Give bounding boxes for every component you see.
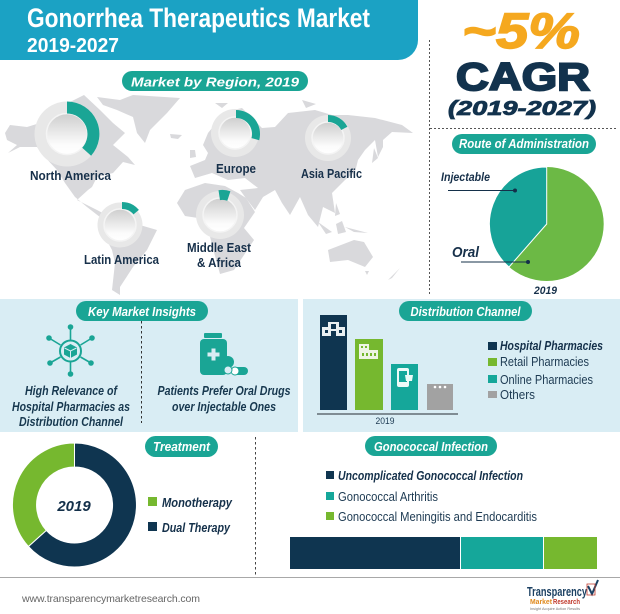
heading: key market insights: Key Market Insights	[88, 304, 196, 319]
header banner: Gonorrhea Therapeutics Market	[27, 3, 370, 33]
legend: distribution channel	[488, 338, 603, 402]
donut chart: treatment: 2019	[56, 498, 91, 515]
legend: gonococcal infection: Gonococcal Meningitis and Endocarditis	[338, 509, 537, 524]
bar chart: distribution channel: 2019	[376, 416, 394, 427]
logo: transparency market research: Market	[530, 597, 552, 606]
donut: north america: North America	[30, 169, 112, 183]
text: hospital pharmacies insight	[12, 383, 130, 429]
bar chart: distribution channel	[317, 315, 458, 427]
panel: distribution channel	[303, 299, 620, 432]
legend: gonococcal infection: Gonococcal Arthritis	[338, 489, 438, 504]
donut: asia pacific: Asia Pacific	[301, 167, 362, 181]
donut: europe: Europe	[216, 162, 256, 176]
logo: transparency market research: Insight Acquire Action Results	[530, 606, 580, 611]
heading: route of administration	[452, 134, 596, 154]
panel: key market insights	[0, 299, 298, 432]
text: hospital pharmacies insight: Distribution Channel	[19, 414, 123, 429]
legend: gonococcal infection	[326, 468, 537, 524]
text: oral drugs insight: Patients Prefer Oral Drugs	[158, 383, 290, 398]
donut: asia pacific	[301, 115, 362, 181]
logo: transparency market research: Research	[553, 597, 580, 606]
stacked bar: gonococcal infection	[290, 537, 597, 569]
header banner	[0, 0, 418, 60]
pie chart: route of administration: Injectable	[441, 170, 490, 184]
donut: middle east and africa: & Africa	[197, 256, 242, 270]
legend: treatment: Dual Therapy	[162, 520, 231, 535]
text: hospital pharmacies insight: Hospital Pharmacies as	[12, 399, 130, 414]
footer url: www.transparencymarketresearch.com	[21, 593, 200, 605]
heading: treatment	[145, 436, 218, 457]
legend: gonococcal infection: Uncomplicated Gonococcal Infection	[338, 468, 523, 483]
legend: distribution channel: Retail Pharmacies	[500, 354, 589, 369]
donut: north america	[30, 102, 112, 183]
donut: latin america	[84, 202, 160, 267]
logo: transparency market research: Transparency	[527, 584, 588, 599]
legend: distribution channel: Online Pharmacies	[500, 372, 593, 387]
heading: key market insights	[76, 301, 208, 321]
heading: distribution channel	[399, 301, 532, 321]
pie chart: route of administration: Oral	[452, 244, 480, 261]
cagr callout: (2019-2027)	[448, 98, 596, 120]
pie chart: route of administration: 2019	[533, 285, 558, 297]
legend: treatment: Monotherapy	[162, 495, 233, 510]
heading: market by region	[122, 71, 308, 91]
heading: gonococcal infection: Gonococcal Infection	[374, 439, 488, 454]
donut: latin america: Latin America	[84, 253, 160, 267]
donut: middle east and africa: Middle East	[187, 241, 252, 255]
header banner: 2019-2027	[27, 35, 119, 57]
donut: middle east and africa	[187, 190, 252, 270]
cagr callout: CAGR	[456, 56, 590, 99]
text: oral drugs insight	[158, 383, 290, 414]
cagr callout	[448, 3, 596, 120]
text: hospital pharmacies insight: High Relevance of	[25, 383, 118, 398]
logo: transparency market research	[527, 580, 598, 611]
world map	[5, 95, 413, 295]
donut: europe	[211, 109, 260, 176]
text: oral drugs insight: over Injectable Ones	[172, 399, 276, 414]
heading: distribution channel: Distribution Channel	[410, 304, 521, 319]
icon: medicine bottle and pills	[200, 333, 248, 375]
heading: gonococcal infection	[365, 436, 497, 456]
donut chart: treatment	[12, 443, 136, 567]
dashed separators: top right	[430, 40, 616, 296]
heading: route of administration: Route of Administration	[459, 136, 589, 151]
icon: network hub with cube	[46, 324, 95, 377]
heading: treatment: Treatment	[153, 439, 211, 454]
legend: treatment	[148, 495, 233, 535]
heading: market by region: Market by Region, 2019	[131, 74, 300, 90]
cagr callout: ~5%	[462, 3, 580, 59]
legend: distribution channel: Others	[500, 387, 535, 402]
pie chart: route of administration	[441, 167, 604, 297]
